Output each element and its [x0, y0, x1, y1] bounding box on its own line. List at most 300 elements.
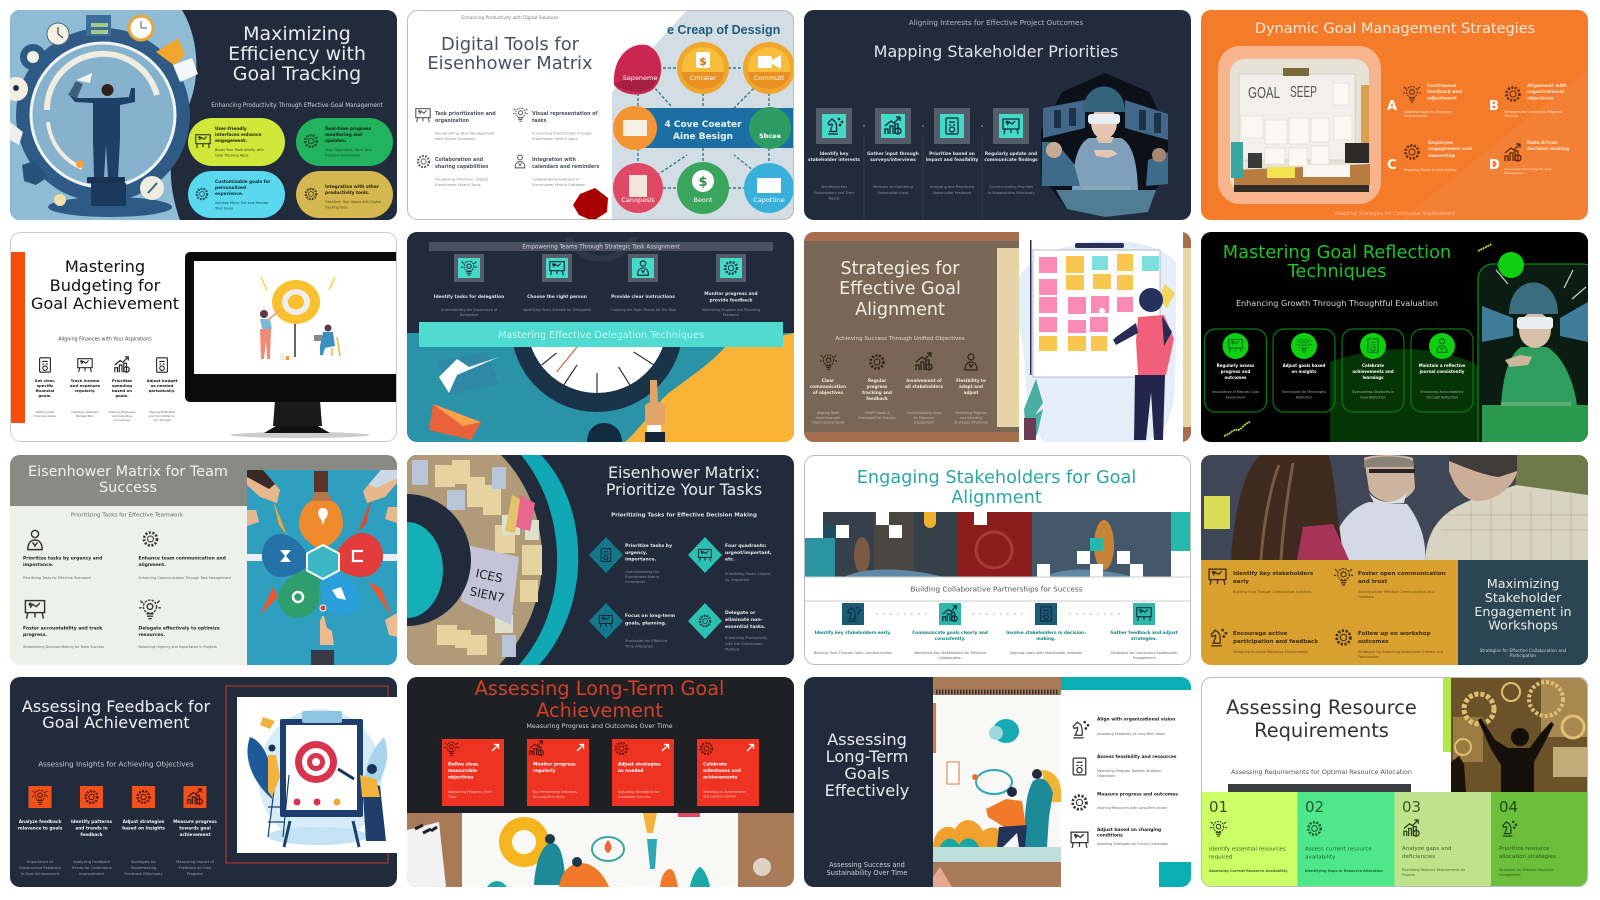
- item: assess: Objectives: [1097, 774, 1115, 778]
- step: monitor: [702, 254, 760, 317]
- strategy B: B: [1489, 99, 1499, 114]
- panel: Mastering Effective Delegation Techniques: [407, 232, 794, 442]
- card: monitor: for Long-Term Goals: [533, 795, 565, 799]
- item: delegate: resources.: [138, 632, 165, 638]
- item: quadrants: vs. Important: [725, 578, 750, 582]
- card: celebrate: Celebrate: [703, 762, 727, 768]
- item: foster: progress.: [23, 632, 47, 638]
- photo: sticky notes with circle overlay: SIEN7: [468, 584, 506, 605]
- step: identify: [70, 786, 112, 876]
- step: communicate: consistently.: [935, 636, 966, 642]
- step: feedback: strategies.: [1131, 636, 1157, 642]
- panel: Assessing Feedback for Goal Achievement: [10, 677, 397, 887]
- teal top band: [1061, 677, 1191, 690]
- title: [839, 259, 961, 320]
- item: delegate: Delegate effectively to optimize: [138, 626, 220, 632]
- panel: Mastering Budgeting for Goal Achievement: [10, 232, 410, 442]
- item: adjust: as needed: [151, 383, 173, 388]
- illustration: process diagram: $: [698, 175, 708, 190]
- strategy C: engagement and: [1428, 146, 1472, 152]
- item: delegate: with the Eisenhower: [725, 642, 763, 646]
- item: task prioritization: with Digital Solutions: [435, 136, 475, 141]
- item: quadrants: urgent/important,: [725, 550, 772, 556]
- item: follow up: Strategies for Sustaining Stakeholder Interest and: [1358, 650, 1443, 654]
- banner photo: [804, 512, 1191, 577]
- item: focus: [589, 603, 675, 648]
- subtitle: Enhancing Productivity Through Effective Goal Management: [211, 103, 383, 109]
- card: customizable: Customizable goals for: [215, 179, 271, 185]
- strategy B: Alignment with: [1527, 83, 1567, 89]
- panel: Maximizing Efficiency with Goal Tracking: [4, 10, 397, 220]
- card: celebrate: milestones and: [703, 768, 741, 774]
- card: journal: [1411, 329, 1473, 412]
- card: monitor: [527, 739, 589, 806]
- step 2: Methods for Gathering: [873, 185, 913, 189]
- card: real-time: Real-time progress: [325, 126, 372, 132]
- strategy D: Leveraging Technology for Goal: [1504, 167, 1551, 171]
- item: measure: Measure progress and outcomes: [1097, 792, 1178, 798]
- step: choose: [523, 254, 591, 312]
- title: Assessing Long-Term Goal: [475, 677, 724, 700]
- step: communicate: Communicate goals clearly and: [912, 630, 988, 636]
- photo: green-tinted woman: [1478, 252, 1598, 454]
- item: adjust: and Committed to: [149, 414, 175, 418]
- item: identify: early: [1233, 579, 1249, 585]
- card: real-time: updates.: [325, 138, 347, 144]
- item: enhance: alignment.: [138, 562, 166, 568]
- step: measure: Progress: [187, 872, 203, 876]
- step: measure: Measuring Impact of: [176, 860, 215, 864]
- item: delegate: Method: [725, 648, 739, 652]
- step: analyze: in Goal Achievement: [21, 872, 60, 876]
- subtitle: Prioritizing Tasks for Effective Decision Making: [611, 512, 757, 518]
- item: flexibility: and Adjusting: [960, 416, 982, 420]
- item: regular progress: Framework for Success: [859, 416, 896, 420]
- illustration: process diagram: Beont: [693, 196, 713, 204]
- step 2: Gather input through: [867, 151, 919, 157]
- item: prioritize: Framework: [625, 580, 646, 584]
- illustration: monitor with target: [185, 252, 410, 438]
- step: adjust: based on insights: [122, 826, 165, 832]
- step: measure: Feedback on Goal: [179, 866, 211, 870]
- strategy C: C: [1387, 158, 1397, 173]
- step: adjust: [122, 786, 165, 876]
- item: enhance: Enhance team communication and: [138, 556, 226, 562]
- item: prioritize: Prioritize: [112, 378, 132, 383]
- step: instructions: [610, 254, 676, 312]
- panel: Assessing Resource Requirements: [1201, 677, 1588, 887]
- step 4: communicate findings: [984, 157, 1038, 163]
- item: flexibility: [954, 354, 988, 424]
- panel: Assessing Long-Term Goals Effectively: Sustainability Over Time: [827, 869, 907, 877]
- step: measure: [173, 786, 217, 876]
- item: collaboration: sharing capabilities: [435, 164, 488, 170]
- title: Efficiency with: [228, 43, 366, 65]
- strategy C: ownership: [1428, 153, 1456, 159]
- card: user-friendly: Boost Your Productivity with: [215, 148, 264, 152]
- subtitle: Enhancing Productivity with Digital Solutions: [461, 15, 559, 21]
- column 02: 02: [1305, 798, 1324, 816]
- title: [32, 260, 179, 309]
- column 02: [1298, 792, 1394, 887]
- strategy D: Data-driven: [1527, 140, 1558, 146]
- item: task prioritization: Streamlining Task Management: [435, 130, 495, 136]
- card: journal: Maintain a reflective: [1419, 363, 1466, 368]
- card: integration: [296, 171, 393, 218]
- decorative red hexagon icon: [573, 188, 608, 221]
- illustration: team on analytics sheet: [407, 813, 771, 887]
- item: assess: Measuring Progress Towards Strategic: [1097, 769, 1161, 773]
- footer: Adapting Strategies for Continuous Improvement: [1335, 211, 1455, 217]
- title: [228, 23, 366, 85]
- item: involvement: Involvement of: [906, 378, 942, 383]
- column 03: 03: [1402, 798, 1421, 816]
- item: encourage: Designing Inclusive Workshop Environments: [1233, 650, 1308, 654]
- item: prioritize: importance.: [23, 562, 54, 568]
- step 1: Stakeholders and Their: [814, 191, 855, 195]
- item: prioritize: urgency,: [625, 550, 648, 556]
- subtitle: Building Collaborative Partnerships for Success: [910, 584, 1083, 594]
- item: delegate: eliminate non-: [725, 617, 763, 623]
- item: collaboration: Collaboration and: [435, 157, 484, 163]
- step: identify: Understanding the Importance of: [441, 308, 498, 312]
- strategy D: [1489, 140, 1569, 175]
- item: enhance: Enhancing Communication Through Task Management: [138, 576, 232, 580]
- illustration: process diagram: Sbcee: [759, 132, 782, 140]
- strategy D: decision making: [1527, 146, 1569, 152]
- item: assess: [1073, 754, 1177, 778]
- card: integration: Tracking Tools: [324, 206, 348, 210]
- step: measure: achievement: [179, 832, 211, 838]
- item: integration: calendars and reminders: [532, 164, 599, 170]
- card: define: Define clear,: [448, 762, 479, 768]
- item: align: [1073, 716, 1175, 738]
- card: adjust: Sustained Success: [618, 795, 651, 799]
- title: Techniques: [1287, 261, 1386, 282]
- card: journal: Through Reflection: [1425, 396, 1458, 400]
- title: Achievement: [536, 699, 663, 722]
- item: adjust: Adjust based on changing: [1097, 827, 1161, 833]
- card: customizable: personalized: [215, 185, 246, 191]
- step: communicate: Identifying Key Stakeholders for Effective: [914, 651, 986, 655]
- item: regular progress: progress: [867, 384, 888, 389]
- illustration: process diagram: e Creap of Dessign: [667, 23, 780, 37]
- title panel: Participation: [1510, 653, 1536, 658]
- card: integration: Transform Your Habits with Digital: [324, 200, 381, 204]
- card: user-friendly: User-friendly: [215, 126, 247, 132]
- item: visual representation: Eisenhower Matrix Apps: [532, 136, 578, 141]
- step: feedback: [1110, 603, 1178, 660]
- step: analyze: Importance of: [27, 860, 54, 864]
- strategy A: adjustment: [1427, 96, 1457, 102]
- step: communicate: Collaboration: [938, 656, 962, 660]
- item: prioritize: Prioritize tasks by urgency and: [23, 556, 102, 562]
- item: foster: and trust: [1358, 579, 1387, 585]
- title: Maximizing: [243, 23, 351, 45]
- subtitle: Aligning Interests for Effective Project Outcomes: [909, 18, 1083, 27]
- item: visual representation: tasks: [532, 118, 547, 124]
- step: analyze: [18, 786, 63, 876]
- card: user-friendly: engagement.: [215, 138, 247, 144]
- item: goals: goals.: [38, 393, 52, 398]
- step: adjust: Strategies for: [131, 860, 157, 864]
- title: [22, 697, 211, 732]
- step: monitor: Feedback: [723, 313, 739, 317]
- column 02: Assess current resource: [1305, 846, 1372, 852]
- title: Assessing: [827, 730, 907, 749]
- strategy A: A: [1387, 99, 1397, 114]
- item: quadrants: etc.: [725, 556, 735, 562]
- item: clear communication: communication: [810, 384, 846, 389]
- step: analyze: Constructive Feedback: [19, 866, 62, 870]
- item: flexibility: Strategies Effectively: [954, 420, 988, 424]
- column 02: availability: [1305, 854, 1336, 860]
- item: measure: Aligning Resources with Long-Term Vision: [1097, 806, 1167, 810]
- item: foster: Foster accountability and track: [23, 626, 103, 632]
- item: foster: Streamlining Decision-Making for Team Success: [23, 645, 104, 649]
- item: identify: [1209, 569, 1314, 594]
- illustration: process diagram: Commutt: [754, 74, 785, 82]
- card: adjust: Adjust goals based: [1283, 363, 1326, 368]
- item: flexibility: adjust: [964, 390, 978, 395]
- step 3: Stakeholder Feedback: [933, 191, 972, 195]
- title: Effectively: [825, 781, 910, 800]
- card: adjust: Adjusting Strategies for: [618, 790, 660, 794]
- item: foster: Foster open communication: [1358, 571, 1446, 577]
- card: adjust: Adjust strategies: [618, 762, 661, 768]
- step 3: Analyzing and Prioritizing: [930, 185, 974, 189]
- strategy A: feedback and: [1427, 89, 1462, 95]
- title panel: [1458, 560, 1588, 665]
- item: adjust: Staying Motivated: [149, 410, 175, 414]
- title: Budgeting for: [50, 276, 161, 295]
- item: prioritize: and Adjusting: [112, 414, 132, 418]
- item: goals: specific: [37, 383, 54, 388]
- item: quadrants: Four quadrants:: [725, 543, 767, 549]
- card: adjust: Techniques for Meaningful: [1281, 390, 1326, 394]
- card: real-time: monitoring and: [325, 132, 362, 138]
- strategy B: objectives: [1527, 96, 1554, 102]
- illustration: process diagram: Capottine: [753, 196, 785, 204]
- item: identify: Identify key stakeholders: [1233, 571, 1314, 577]
- item: visual representation: [513, 108, 598, 141]
- strategy B: Tracking: [1503, 114, 1518, 118]
- item: delegate: [688, 603, 768, 652]
- title: [1223, 242, 1451, 282]
- item: involvement: for Maximum: [913, 416, 935, 420]
- photo: goal whiteboard on a desk: GOAL: [1248, 85, 1280, 102]
- panel: Maximizing Stakeholder Engagement in Workshops: [1201, 455, 1588, 665]
- item: track: Budget Plan: [76, 414, 94, 418]
- step: adjust: Feedback Effectively: [124, 872, 163, 876]
- illustration: process diagram: Sapeneme: [623, 74, 657, 82]
- item: clear communication: Aligning Team: [817, 411, 839, 415]
- title: [28, 464, 228, 496]
- item: encourage: Encourage active: [1233, 631, 1288, 637]
- card: real-time: Stay Organized: Track Your: [325, 148, 372, 152]
- item: align: Align with organizational vision: [1097, 716, 1175, 722]
- item: align: Assessing Feasibility of Long-Term Goals: [1097, 732, 1165, 736]
- item: prioritize: Prioritize tasks by: [625, 543, 672, 549]
- panel: Assessing Long-Term Goals Effectively: [804, 677, 1191, 887]
- illustration: process diagram: [612, 10, 795, 220]
- strategy A: [1387, 83, 1462, 118]
- card: assess: outcomes: [1225, 375, 1247, 380]
- step: adjust: Implementing: [131, 866, 156, 870]
- column 03: Prioritizing Resource Requirements for: [1402, 868, 1466, 872]
- step: feedback: Engagement: [1133, 656, 1156, 660]
- subtitle: Aligning Finances with Your Aspirations: [58, 336, 152, 342]
- item: goals: [34, 358, 56, 418]
- subtitle: Assessing Success and: [829, 861, 905, 869]
- step: instructions: Provide clear instructions: [611, 294, 675, 300]
- card: journal: journal consistently: [1419, 369, 1465, 374]
- title: Requirements: [1254, 719, 1389, 742]
- photo: sticky notes with circle overlay: ICES: [474, 566, 504, 586]
- step: involve: making.: [1036, 636, 1056, 642]
- strategy D: Management: [1504, 171, 1525, 175]
- card: user-friendly: Goal Tracking Apps: [215, 154, 249, 158]
- title: Mastering Goal Reflection: [1223, 242, 1451, 263]
- photo: silhouette and machinery: [1443, 677, 1588, 800]
- card: define: measurable: [448, 768, 477, 774]
- title panel: Maximizing: [1487, 577, 1559, 592]
- card: celebrate: [1342, 329, 1404, 412]
- panel: Eisenhower Matrix: Prioritize Your Tasks: [343, 455, 794, 665]
- illustration: person at sticky-note board: [1019, 232, 1183, 442]
- column 03: Projects: [1402, 873, 1415, 877]
- step: identify: feedback: [80, 832, 103, 838]
- step: involve: Aligning Goals with Stakeholder Interests: [1010, 651, 1082, 655]
- item: goals: Setting Clear: [36, 410, 55, 414]
- item: enhance: [138, 532, 232, 580]
- illustration: hands and colored petals: [247, 470, 397, 665]
- item: visual representation: Enhancing Productivity through: [532, 130, 592, 136]
- title: Goals: [844, 764, 890, 783]
- card: celebrate: Celebrate: [1362, 363, 1384, 368]
- item: focus: goals, planning.: [625, 620, 667, 626]
- item: regular progress: feedback: [866, 396, 888, 401]
- item: identify: Building Trust Through Collaborative Activities: [1233, 590, 1312, 594]
- illustration: process diagram: Canopesis: [621, 196, 655, 204]
- card: define: Measuring Progress Over: [448, 790, 492, 794]
- item: follow up: Participation: [1358, 655, 1379, 659]
- step: involve: [1006, 603, 1086, 655]
- subtitle: Assessing Insights for Achieving Objectives: [38, 760, 194, 768]
- item: foster: Feedback: [1358, 595, 1374, 599]
- title banner: [419, 322, 783, 347]
- strategy A: Continuous: [1427, 83, 1457, 89]
- item: adjust: [146, 358, 178, 422]
- column 01: Assessing Current Resource Availability: [1209, 869, 1288, 873]
- step: instructions: Choosing the Right Person for the Task: [610, 308, 676, 312]
- card: define: [442, 739, 504, 806]
- item: follow up: outcomes: [1358, 639, 1389, 645]
- strategy D: D: [1489, 158, 1500, 173]
- step 1: stakeholder interests: [808, 157, 860, 163]
- card: celebrate: achievements and: [1352, 369, 1394, 374]
- column 01: required: [1209, 854, 1233, 860]
- item: regular progress: [859, 356, 896, 420]
- strategy C: Engaging Teams in Goal Setting: [1404, 168, 1456, 172]
- column 03: [1394, 792, 1491, 887]
- subtitle: Assessing Requirements for Optimal Resource Allocation: [1231, 768, 1412, 776]
- step 1: Identify key: [820, 151, 849, 157]
- column 01: Identify essential resources: [1209, 846, 1286, 852]
- item: collaboration: [418, 156, 488, 187]
- step: feedback: Gather feedback and adjust: [1110, 630, 1178, 636]
- title: Long-Term: [826, 747, 908, 766]
- item: involvement: [905, 353, 943, 424]
- item: follow up: Follow up on workshop: [1358, 631, 1431, 637]
- strategy A: Environments: [1404, 114, 1427, 118]
- title: Digital Tools for: [441, 34, 580, 55]
- step: monitor: Monitor progress and: [704, 291, 758, 297]
- item: delegate: Delegate or: [725, 610, 756, 616]
- card: integration: productivity tools.: [325, 190, 370, 196]
- item: goals: financial: [36, 388, 54, 393]
- panel: Strategies for Effective Goal Alignment: [804, 232, 1191, 442]
- item: clear communication: Clear: [822, 378, 835, 383]
- panel: Digital Tools for Eisenhower Matrix: [407, 10, 795, 221]
- step: identify: Building Trust Through Open Communication: [814, 651, 892, 655]
- title: [429, 36, 592, 70]
- title: Engaging Stakeholders for Goal: [857, 468, 1136, 488]
- item: adjust: Adapting Strategies for Future Challenges: [1097, 842, 1168, 846]
- card: journal: Enhancing Accountability: [1421, 390, 1463, 394]
- item: track: regularly.: [75, 388, 96, 393]
- illustration: notebook analytics: [933, 677, 1061, 887]
- item: quadrants: Prioritizing Tasks: Urgent: [725, 572, 771, 576]
- subtitle: Prioritizing Tasks for Effective Teamwork: [71, 512, 184, 518]
- item: adjust: Your Budget: [153, 418, 172, 422]
- title: Goal Achievement: [42, 713, 190, 732]
- item: prioritize: goals.: [115, 393, 129, 398]
- item: delegate: essential tasks.: [725, 624, 766, 630]
- item: prioritize: [23, 530, 102, 580]
- item: prioritize: spending: [112, 383, 132, 388]
- item: integration: Collaborative Features in: [532, 176, 580, 182]
- item: prioritize: [589, 537, 672, 584]
- illustration: process diagram: $: [699, 55, 707, 68]
- illustration: man conducting goal dial: [4, 10, 198, 220]
- card: define: objectives: [448, 774, 474, 780]
- item: measure: [1073, 792, 1178, 810]
- item: clear communication: Organizational Goals: [811, 420, 845, 424]
- title: Goal Achievement: [31, 294, 179, 313]
- step: identify: and trends in: [75, 826, 108, 832]
- item: integration: [515, 155, 599, 187]
- item: collaboration: Visualizing Priorities: Digital: [435, 176, 488, 182]
- card: celebrate: and Lessons Learned: [703, 794, 736, 798]
- illustration: clock and envelope: [429, 240, 794, 442]
- step: identify: Improvement: [79, 872, 104, 876]
- item: involvement: Engagement: [914, 420, 935, 424]
- item: prioritize: [108, 357, 136, 422]
- item: track: and expenses: [70, 383, 101, 388]
- item: delegate: [138, 600, 220, 649]
- photo: goal whiteboard on a desk: [1218, 46, 1381, 204]
- item: track: Track income: [71, 378, 100, 383]
- step 1: Identifying Key: [821, 185, 847, 189]
- item: integration: Integration with: [532, 157, 576, 163]
- title: Goal Tracking: [233, 63, 361, 85]
- column 04: [1491, 792, 1588, 887]
- card: customizable: Your Goals: [215, 206, 234, 210]
- item: adjust: Adjust budget: [146, 378, 178, 383]
- title panel: Workshops: [1488, 618, 1558, 634]
- title: Dynamic Goal Management Strategies: [1255, 21, 1535, 37]
